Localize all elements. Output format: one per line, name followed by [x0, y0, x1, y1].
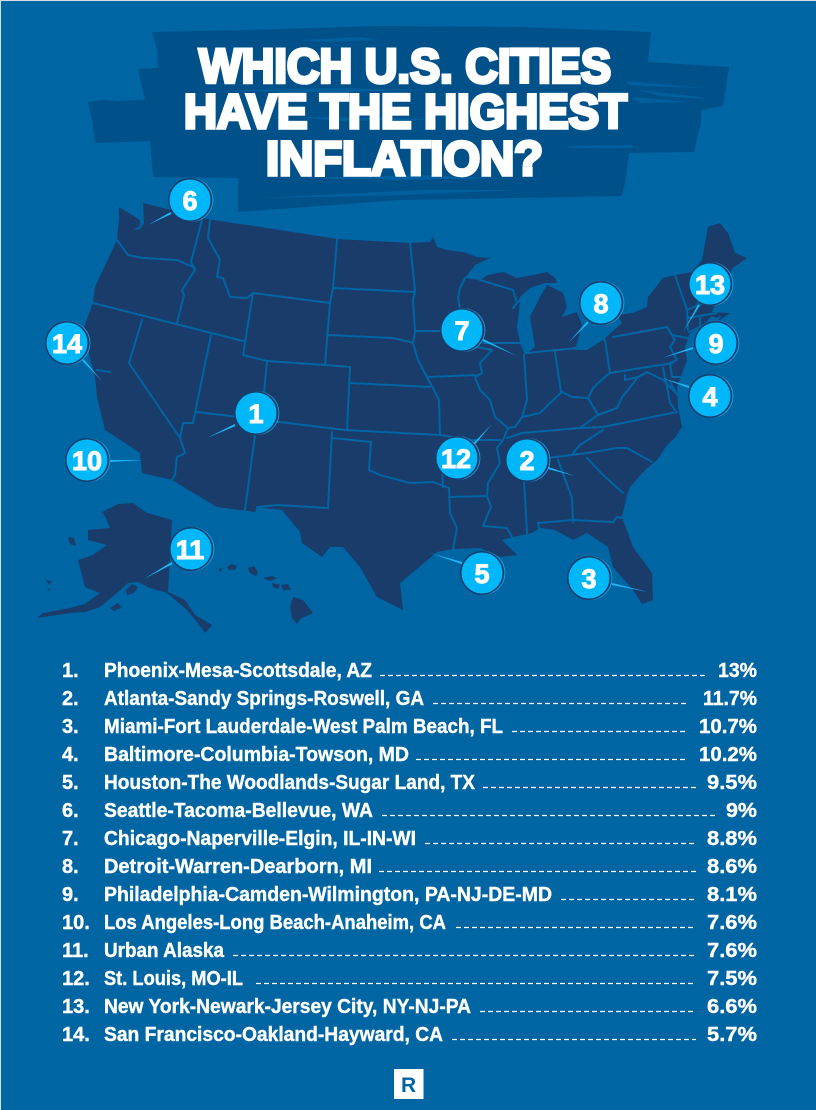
pin 11: Alaska — [144, 527, 214, 579]
row 10: 10. — [62, 912, 90, 934]
row 1: Phoenix-Mesa-Scottsdale, AZ — [104, 660, 372, 682]
row 9: 8.1% — [707, 884, 757, 906]
row 14: 14. — [62, 1024, 90, 1046]
logo — [394, 1069, 424, 1099]
pin 5: Houston — [430, 551, 505, 595]
pin 1: Phoenix — [207, 391, 279, 438]
row 8: Detroit-Warren-Dearborn, MI — [104, 856, 372, 878]
pin 7: Chicago — [440, 308, 517, 356]
row 13: 6.6% — [707, 996, 757, 1018]
pin 13: New York — [683, 262, 733, 332]
row 11: 7.6% — [707, 940, 757, 962]
row 14 — [62, 1024, 757, 1046]
row 10: Los Angeles-Long Beach-Anaheim, CA — [104, 912, 446, 934]
row 5: 9.5% — [707, 772, 757, 794]
row 8: 8.6% — [707, 856, 757, 878]
title — [184, 40, 627, 186]
pin 2: Atlanta: 2 — [519, 446, 535, 476]
pin 14: San Francisco — [45, 321, 102, 381]
contiguous states landmass — [83, 203, 747, 610]
row 11 — [62, 940, 757, 962]
pin 2: Atlanta — [505, 438, 575, 482]
row 11: Urban Alaska — [104, 940, 225, 962]
pin 9: Philadelphia: 9 — [708, 329, 724, 359]
row 10 — [62, 912, 757, 934]
state borders — [93, 220, 720, 549]
row 6: Seattle-Tacoma-Bellevue, WA — [104, 800, 373, 822]
pin 5: Houston: 5 — [474, 559, 490, 589]
pin 6: Seattle — [148, 178, 213, 225]
row 2: Atlanta-Sandy Springs-Roswell, GA — [104, 688, 424, 710]
row 1 — [62, 660, 757, 682]
row 14: San Francisco-Oakland-Hayward, CA — [104, 1024, 443, 1046]
row 12: St. Louis, MO-IL — [104, 968, 243, 990]
row 12 — [62, 968, 757, 990]
row 7: 7. — [62, 828, 79, 850]
title: INFLATION? — [266, 132, 543, 186]
row 1: 1. — [62, 660, 79, 682]
title banner: brush stroke — [88, 26, 729, 212]
row 2: 11.7% — [703, 688, 757, 710]
Alaska — [37, 503, 212, 633]
row 4 — [62, 744, 757, 766]
row 13: New York-Newark-Jersey City, NY-NJ-PA — [104, 996, 471, 1018]
pin 12: St. Louis — [435, 424, 492, 480]
pin 10: Los Angeles: 10 — [72, 446, 102, 476]
row 14: 5.7% — [707, 1024, 757, 1046]
logo: R — [401, 1074, 416, 1097]
row 9: 9. — [62, 884, 79, 906]
pin 1: Phoenix: 1 — [248, 399, 264, 429]
row 12: 7.5% — [707, 968, 757, 990]
row 1: 13% — [718, 660, 757, 682]
pin 3: Miami: 3 — [581, 564, 597, 594]
row 4: Baltimore-Columbia-Towson, MD — [104, 744, 409, 766]
row 7: 8.8% — [707, 828, 757, 850]
title: WHICH U.S. CITIES — [199, 40, 611, 94]
pin 9: Philadelphia — [662, 321, 739, 365]
pin 4: Baltimore — [662, 374, 733, 418]
Hawaii — [218, 564, 313, 624]
row 6 — [62, 800, 757, 822]
map of the United States — [37, 203, 747, 633]
row 3: 3. — [62, 716, 79, 738]
row 10: 7.6% — [707, 912, 757, 934]
row 8: 8. — [62, 856, 79, 878]
row 7 — [62, 828, 757, 850]
row 7: Chicago-Naperville-Elgin, IL-IN-WI — [104, 828, 416, 850]
pin 8: Detroit — [568, 281, 624, 343]
ranking list — [62, 660, 757, 1046]
row 5: Houston-The Woodlands-Sugar Land, TX — [104, 772, 476, 794]
pin 11: Alaska: 11 — [176, 535, 204, 565]
row 11: 11. — [62, 940, 89, 962]
pin 3: Miami — [567, 556, 648, 600]
row 6: 6. — [62, 800, 79, 822]
row 8 — [62, 856, 757, 878]
Alaska islands — [46, 537, 138, 611]
row 9 — [62, 884, 757, 906]
row 3: Miami-Fort Lauderdale-West Palm Beach, FL — [104, 716, 503, 738]
pin 4: Baltimore: 4 — [702, 382, 718, 412]
pin 10: Los Angeles — [65, 438, 143, 482]
row 9: Philadelphia-Camden-Wilmington, PA-NJ-DE-MD — [104, 884, 552, 906]
row 6: 9% — [726, 800, 757, 822]
pin 14: San Francisco: 14 — [52, 329, 82, 359]
pin 12: St. Louis: 12 — [441, 444, 471, 474]
row 5: 5. — [62, 772, 79, 794]
row 4: 10.2% — [699, 744, 757, 766]
row 3: 10.7% — [699, 716, 757, 738]
row 13: 13. — [62, 996, 90, 1018]
title: HAVE THE HIGHEST — [184, 85, 627, 139]
row 3 — [62, 716, 757, 738]
pin 6: Seattle: 6 — [182, 186, 198, 216]
row 5 — [62, 772, 757, 794]
pin 8: Detroit: 8 — [593, 289, 609, 319]
row 2: 2. — [62, 688, 79, 710]
pin 13: New York: 13 — [695, 270, 725, 300]
row 13 — [62, 996, 757, 1018]
row 2 — [62, 688, 757, 710]
row 4: 4. — [62, 744, 79, 766]
pin 7: Chicago: 7 — [454, 316, 470, 346]
row 12: 12. — [62, 968, 90, 990]
